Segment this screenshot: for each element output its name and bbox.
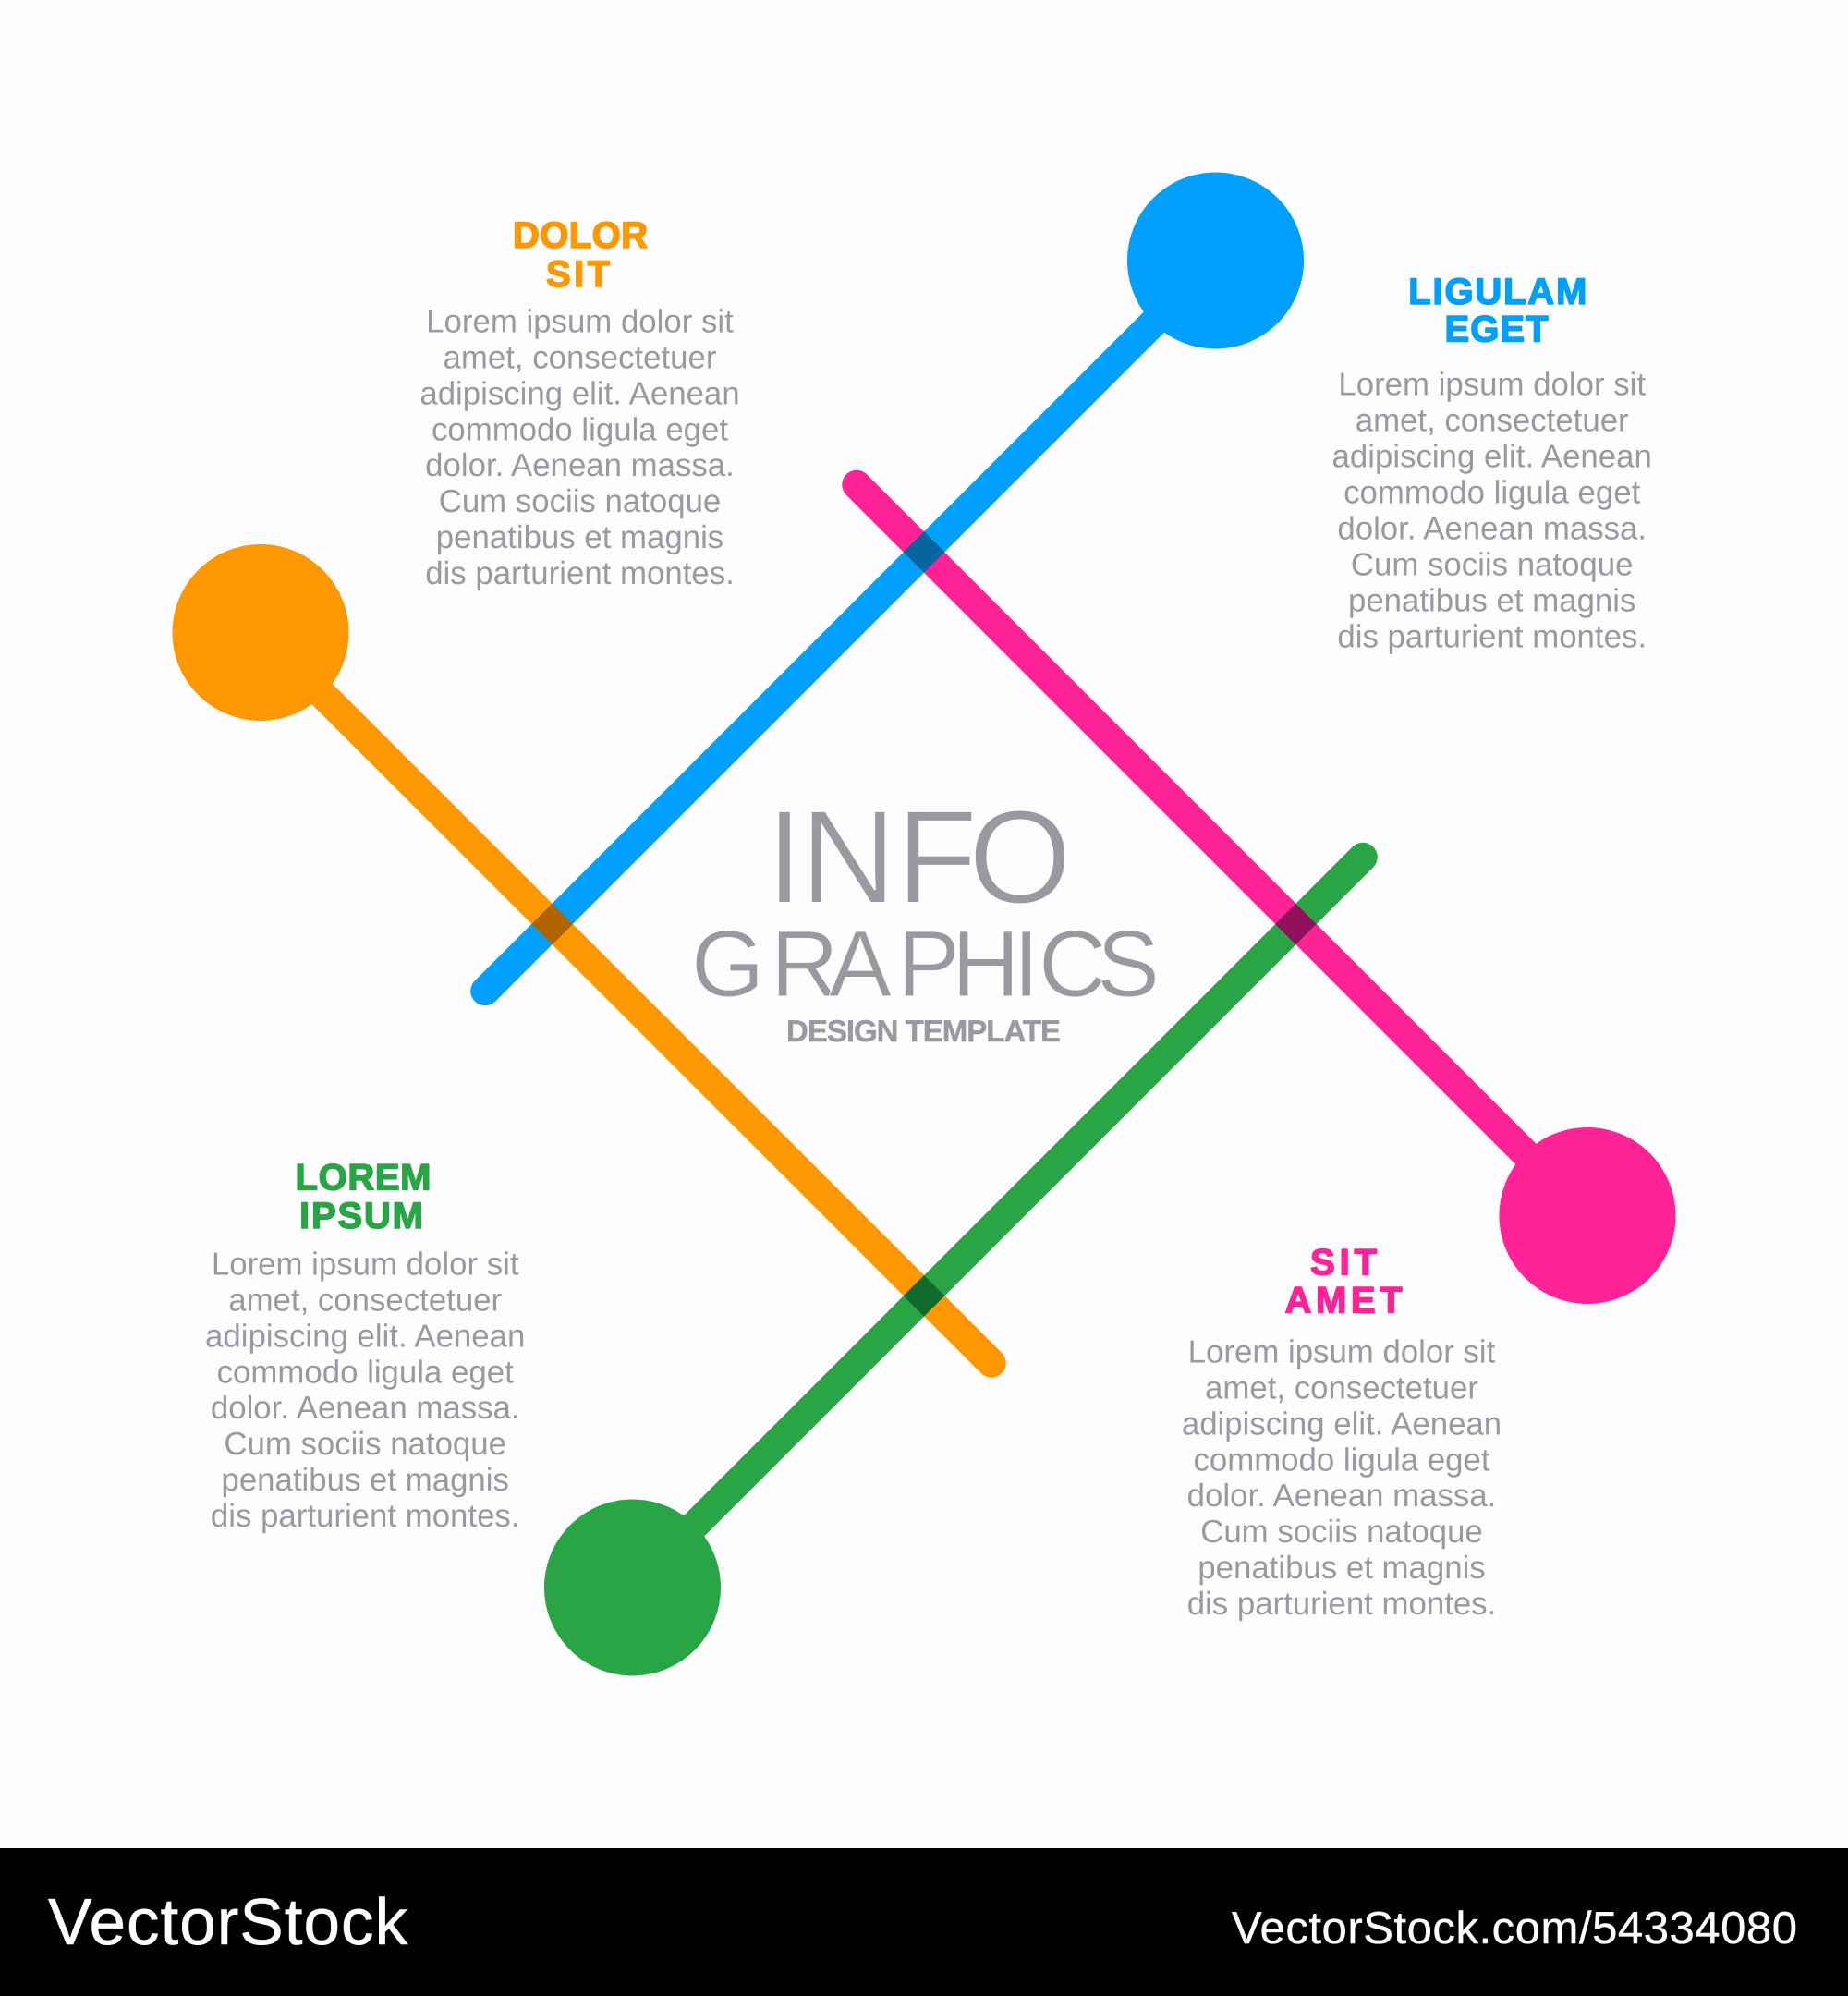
body text: dolor sit: penatibus et magnis	[436, 519, 723, 555]
body text: lorem ipsum: dolor. Aenean massa.	[211, 1390, 520, 1426]
body text: dolor sit: Lorem ipsum dolor sit	[426, 303, 734, 339]
heading: lorem ipsum	[296, 1158, 431, 1236]
crossing: pink and green	[1275, 904, 1317, 944]
body text: lorem ipsum: Lorem ipsum dolor sit	[212, 1246, 519, 1282]
body text: ligulam eget: dis parturient montes.	[1337, 618, 1647, 654]
body text: sit amet: dolor. Aenean massa.	[1187, 1478, 1496, 1514]
body text: lorem ipsum: adipiscing elit. Aenean	[205, 1318, 525, 1354]
body text: sit amet: penatibus et magnis	[1198, 1550, 1486, 1586]
body text: ligulam eget: penatibus et magnis	[1348, 582, 1635, 618]
body text: lorem ipsum: amet, consectetuer	[228, 1282, 503, 1318]
body text: ligulam eget: adipiscing elit. Aenean	[1332, 438, 1652, 475]
body text: lorem ipsum: commodo ligula eget	[217, 1354, 514, 1390]
body text: ligulam eget: commodo ligula eget	[1343, 474, 1641, 510]
connector: pink line with circle	[857, 484, 1676, 1304]
panel: dolor sit	[419, 215, 740, 591]
body text: sit amet: Cum sociis natoque	[1200, 1514, 1483, 1550]
body text: sit amet: dis parturient montes.	[1187, 1586, 1496, 1622]
heading: ligulam eget: EGET	[1445, 309, 1549, 349]
heading: lorem ipsum: LOREM	[296, 1158, 431, 1199]
body text: lorem ipsum: penatibus et magnis	[221, 1462, 509, 1498]
heading: dolor sit: DOLOR	[513, 215, 648, 256]
body text: dolor sit: amet, consectetuer	[444, 339, 717, 375]
body text: lorem ipsum: Cum sociis natoque	[224, 1426, 506, 1462]
body text: dolor sit: dolor. Aenean massa.	[425, 447, 735, 483]
heading: sit amet	[1284, 1242, 1403, 1321]
body text: dolor sit: commodo ligula eget	[432, 411, 728, 447]
body text: sit amet: commodo ligula eget	[1193, 1442, 1490, 1478]
title line: INFO: INFO	[766, 783, 1072, 931]
heading: dolor sit	[513, 215, 648, 295]
heading: ligulam eget: LIGULAM	[1408, 272, 1587, 312]
footer logo text: VectorStock	[48, 1886, 408, 1959]
body text: ligulam eget: dolor. Aenean massa.	[1337, 510, 1647, 546]
footer image url: VectorStock.com/54334080	[1232, 1904, 1797, 1953]
body text: dolor sit: adipiscing elit. Aenean	[419, 375, 740, 411]
body text: sit amet: adipiscing elit. Aenean	[1182, 1406, 1502, 1442]
body text: sit amet: amet, consectetuer	[1205, 1369, 1478, 1406]
center title	[691, 783, 1160, 1048]
connector: orange line with circle	[172, 544, 991, 1363]
heading: lorem ipsum: IPSUM	[299, 1196, 423, 1236]
footer bar	[0, 1848, 1848, 1996]
body text: ligulam eget: Cum sociis natoque	[1351, 546, 1634, 582]
body text: dolor sit: Cum sociis natoque	[439, 483, 721, 519]
panel: sit amet	[1182, 1242, 1502, 1622]
body text: sit amet: Lorem ipsum dolor sit	[1188, 1333, 1496, 1369]
panel: lorem ipsum	[205, 1158, 525, 1534]
body text: lorem ipsum: dis parturient montes.	[211, 1498, 520, 1534]
crossing: orange and blue	[531, 904, 573, 944]
body text: ligulam eget: Lorem ipsum dolor sit	[1338, 367, 1646, 403]
title line: GRAPHICS: GRAPHICS	[691, 911, 1160, 1016]
connector: blue line with circle	[485, 172, 1304, 991]
heading: dolor sit: SIT	[546, 254, 610, 295]
body text: ligulam eget: amet, consectetuer	[1356, 403, 1629, 439]
connector: green line with circle	[544, 858, 1363, 1676]
heading: sit amet: SIT	[1310, 1242, 1377, 1283]
crossing: orange and green	[904, 1275, 944, 1317]
subtitle: DESIGN TEMPLATE	[786, 1014, 1061, 1048]
heading: ligulam eget	[1408, 272, 1587, 349]
panel: ligulam eget	[1332, 272, 1652, 654]
body text: dolor sit: dis parturient montes.	[425, 555, 735, 591]
heading: sit amet: AMET	[1284, 1281, 1403, 1321]
crossing: blue and pink	[904, 531, 944, 573]
